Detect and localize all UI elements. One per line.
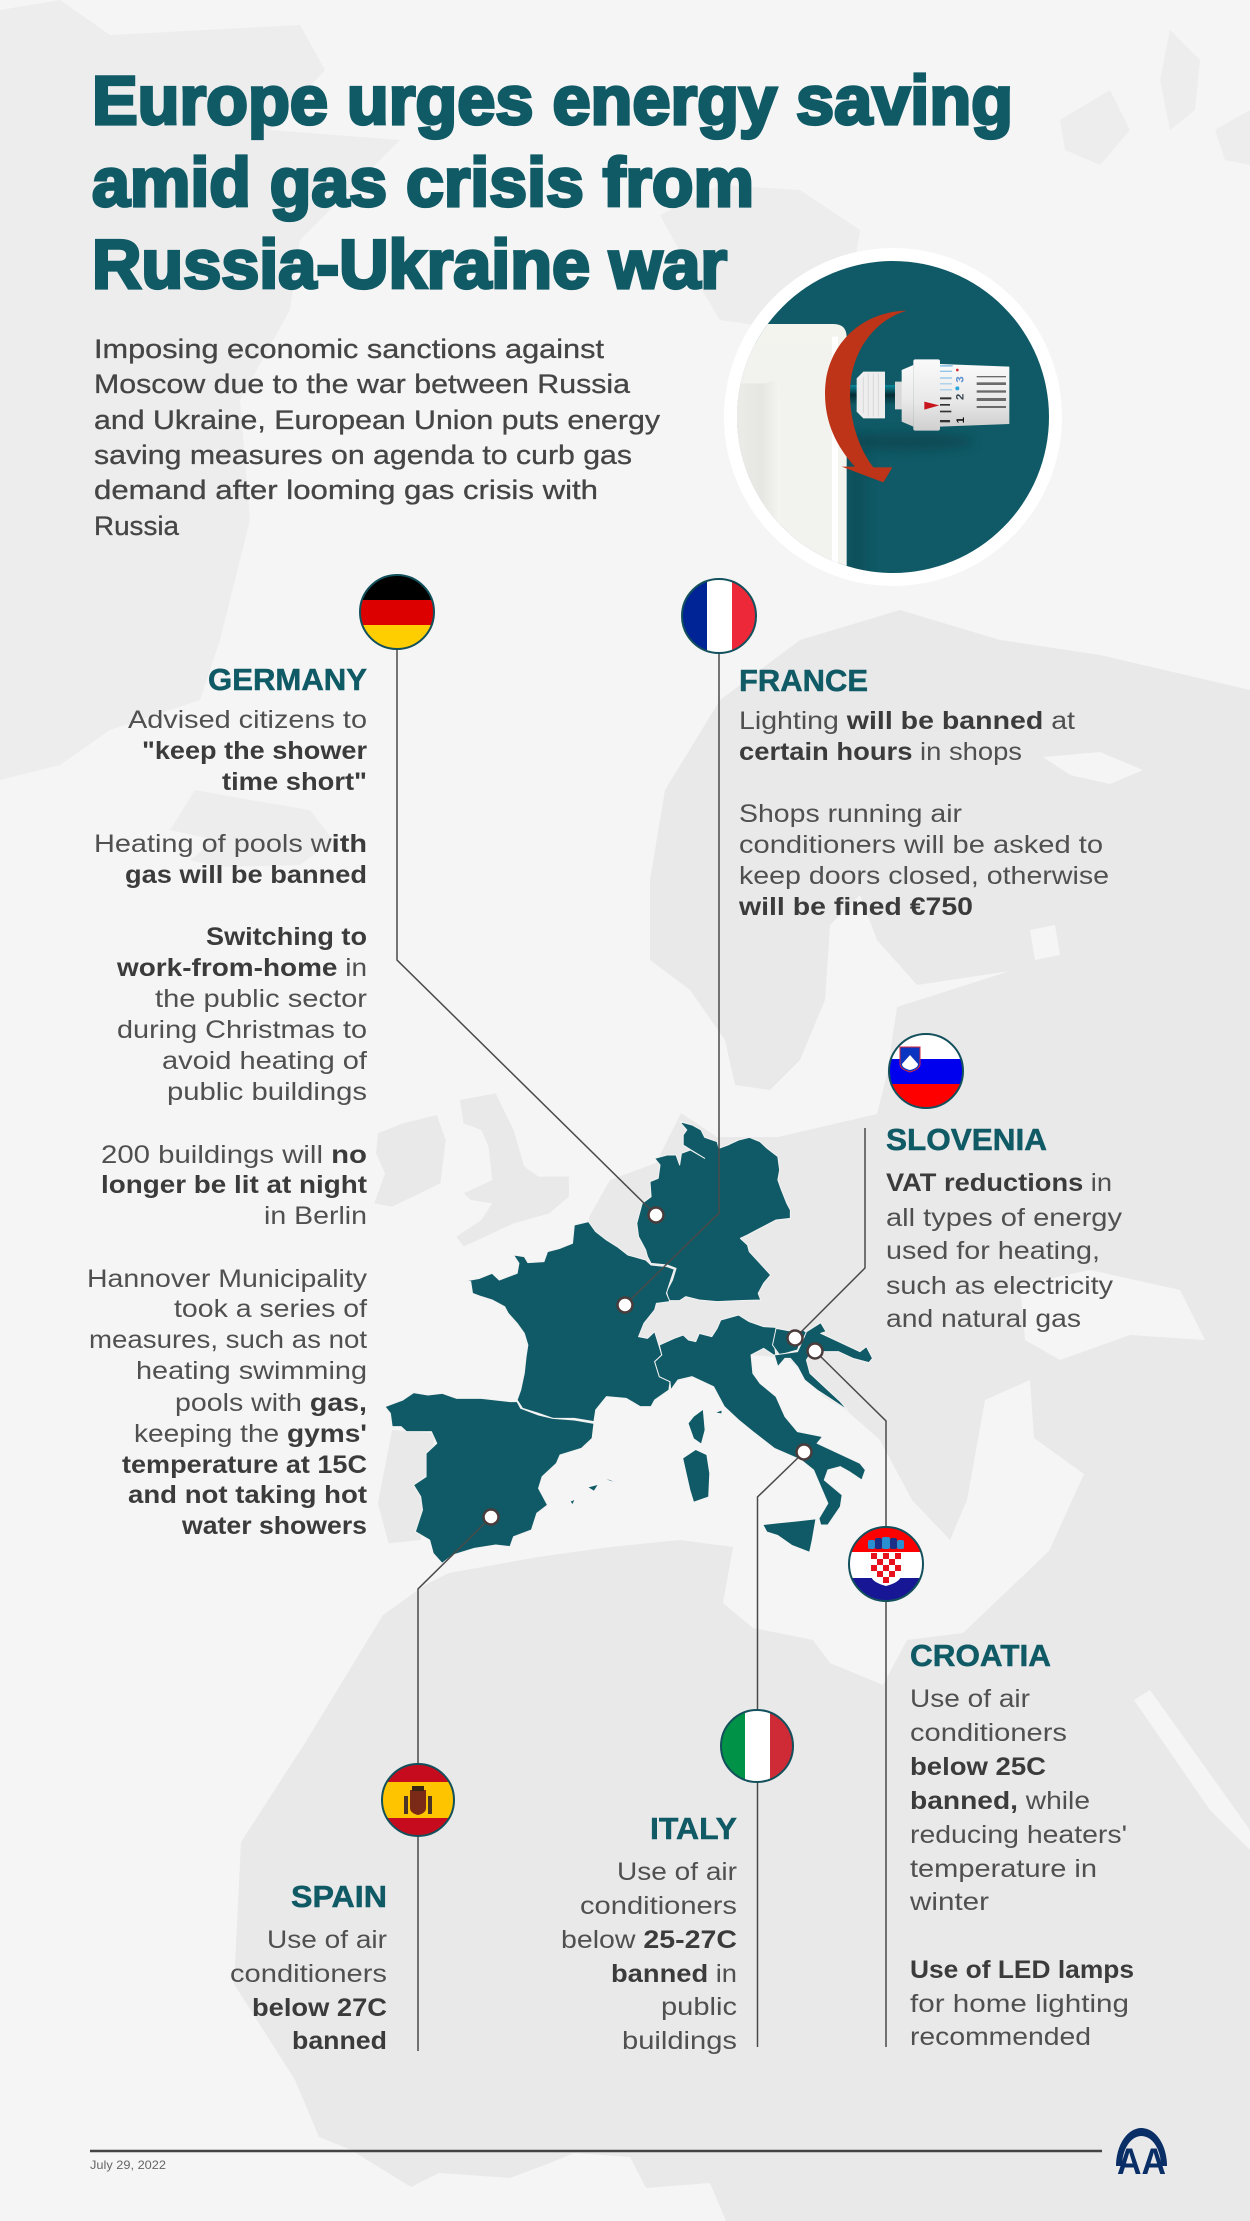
text: Germany measures: time short"	[222, 768, 367, 796]
text: Germany measures: avoid heating of	[162, 1047, 367, 1075]
text: Spain measures: conditioners	[230, 1960, 387, 1988]
text: Spain measures: Use of air	[267, 1926, 387, 1954]
text: Croatia measures: conditioners	[910, 1719, 1067, 1747]
text: France measures: Lighting will be banned at	[739, 707, 1075, 735]
text: Germany measures: work-from-home in	[116, 954, 367, 982]
text: Germany measures: Hannover Municipality	[87, 1265, 368, 1293]
country: Slovenia	[772, 1328, 811, 1355]
flag: Germany	[360, 575, 434, 650]
text: Germany measures: in Berlin	[264, 1202, 367, 1230]
text: Italy measures: public	[661, 1993, 737, 2021]
text: Slovenia measures: all types of energy	[886, 1204, 1123, 1232]
leader line: Germany	[397, 650, 656, 1215]
leader line: Slovenia	[795, 1128, 865, 1338]
text: France measures	[738, 707, 1109, 921]
text: Slovenia measures: used for heating,	[886, 1237, 1100, 1265]
intro text: Imposing economic sanctions against	[94, 334, 605, 364]
panel: Germany	[87, 575, 434, 1540]
text: Germany measures: gas will be banned	[125, 861, 367, 889]
panel: Spain	[230, 1764, 454, 2055]
leader line: Italy	[758, 1452, 804, 2047]
text: Croatia measures: Use of air	[910, 1685, 1030, 1713]
country: Germany	[637, 1122, 790, 1302]
footer rule	[90, 2150, 1102, 2152]
illustration: radiator thermostat being turned down: 3	[954, 376, 966, 383]
leader line: Croatia	[815, 1351, 886, 2047]
heading: Germany: GERMANY	[208, 662, 367, 697]
title	[92, 62, 1013, 303]
text: Croatia measures: banned, while	[910, 1787, 1090, 1815]
text: France measures: conditioners will be asked to	[739, 831, 1103, 859]
text: France measures: keep doors closed, otherwise	[739, 862, 1109, 890]
text: Germany measures: during Christmas to	[117, 1016, 367, 1044]
text: France measures: Shops running air	[739, 800, 962, 828]
text: Spain measures: below 27C	[252, 1994, 387, 2022]
text: Croatia measures	[909, 1685, 1134, 2051]
flag: Italy	[721, 1710, 794, 1782]
flag: Spain	[382, 1764, 454, 1836]
text: Italy measures: below 25-27C	[561, 1926, 737, 1954]
country: Italy	[655, 1315, 865, 1552]
logo: Anadolu Agency: AA	[1117, 2141, 1166, 2182]
text: Germany measures: temperature at 15C	[122, 1451, 367, 1479]
text: Slovenia measures: and natural gas	[886, 1305, 1081, 1333]
text: Italy measures: conditioners	[580, 1892, 737, 1920]
text: Italy measures: banned in	[611, 1960, 737, 1988]
heading: Slovenia: SLOVENIA	[886, 1122, 1047, 1157]
intro text: saving measures on agenda to curb gas	[94, 440, 632, 470]
map: highlighted European countries	[385, 1122, 872, 1563]
text: Croatia measures: below 25C	[910, 1753, 1046, 1781]
text: Germany measures: heating swimming	[136, 1357, 367, 1385]
country: France	[465, 1222, 674, 1422]
country: Croatia	[774, 1323, 872, 1410]
text: Italy measures: buildings	[622, 2027, 737, 2055]
text: Germany measures: pools with gas,	[175, 1389, 367, 1417]
text: Germany measures: 200 buildings will no	[101, 1141, 367, 1169]
text: Croatia measures: Use of LED lamps	[910, 1956, 1134, 1984]
text: Italy measures	[561, 1858, 737, 2055]
heading: Croatia: CROATIA	[910, 1638, 1051, 1673]
illustration: radiator thermostat being turned down	[720, 248, 1062, 586]
intro text: Russia	[94, 511, 180, 541]
text: Slovenia measures	[886, 1169, 1123, 1333]
text: Spain measures	[230, 1926, 387, 2055]
text: Germany measures: "keep the shower	[142, 737, 367, 765]
text: Germany measures: the public sector	[155, 985, 367, 1013]
title: Russia-Ukraine war	[92, 226, 727, 303]
date: July 29, 2022	[90, 2158, 166, 2172]
text: Croatia measures: temperature in	[910, 1855, 1097, 1883]
text: Germany measures: Advised citizens to	[128, 706, 367, 734]
leader line: France	[625, 653, 719, 1305]
text: Germany measures: longer be lit at night	[101, 1171, 368, 1199]
text: Slovenia measures: VAT reductions in	[886, 1169, 1112, 1197]
text: Germany measures: public buildings	[167, 1078, 367, 1106]
illustration: radiator thermostat being turned down: 1	[955, 417, 967, 423]
heading: Spain: SPAIN	[291, 1879, 387, 1914]
text: Germany measures: keeping the gyms'	[134, 1420, 367, 1448]
text: Germany measures: water showers	[181, 1512, 367, 1540]
intro text: demand after looming gas crisis with	[94, 475, 598, 505]
text: Germany measures: took a series of	[174, 1295, 367, 1323]
flag: Slovenia	[889, 1034, 963, 1109]
intro text: Moscow due to the war between Russia	[94, 369, 631, 399]
text: Germany measures: Switching to	[206, 923, 367, 951]
panel: France	[682, 579, 1109, 921]
panel: Slovenia	[886, 1034, 1123, 1333]
flag: France	[682, 579, 757, 653]
text: Germany measures: measures, such as not	[89, 1326, 367, 1354]
intro text	[94, 334, 661, 541]
text: Croatia measures: for home lighting	[910, 1990, 1129, 2018]
text: Croatia measures: winter	[909, 1888, 989, 1916]
flag: Croatia	[849, 1527, 923, 1602]
panel: Croatia	[849, 1527, 1134, 2051]
location markers	[484, 1208, 822, 1524]
text: Croatia measures: reducing heaters'	[910, 1821, 1127, 1849]
title: amid gas crisis from	[92, 144, 754, 221]
text: Italy measures: Use of air	[617, 1858, 737, 1886]
text: Slovenia measures: such as electricity	[886, 1272, 1114, 1300]
leader line: Spain	[418, 1517, 491, 2051]
text: Croatia measures: recommended	[910, 2023, 1091, 2051]
islands: Balearics	[571, 1479, 614, 1504]
title: Europe urges energy saving	[92, 62, 1013, 139]
panel: Italy	[561, 1710, 794, 2055]
heading: Italy: ITALY	[650, 1811, 737, 1846]
text: Germany measures: and not taking hot	[128, 1481, 368, 1509]
text: France measures: certain hours in shops	[739, 738, 1022, 766]
island: Corsica	[689, 1410, 705, 1443]
text: Germany measures: Heating of pools w ith	[94, 830, 367, 858]
intro text: and Ukraine, European Union puts energy	[94, 405, 661, 435]
text: France measures: will be fined €750	[738, 893, 973, 921]
text: Germany measures	[87, 706, 368, 1540]
illustration: radiator thermostat being turned down: 2	[954, 394, 966, 400]
heading: France: FRANCE	[739, 663, 868, 698]
country: Spain	[385, 1393, 594, 1563]
text: Spain measures: banned	[292, 2027, 387, 2055]
